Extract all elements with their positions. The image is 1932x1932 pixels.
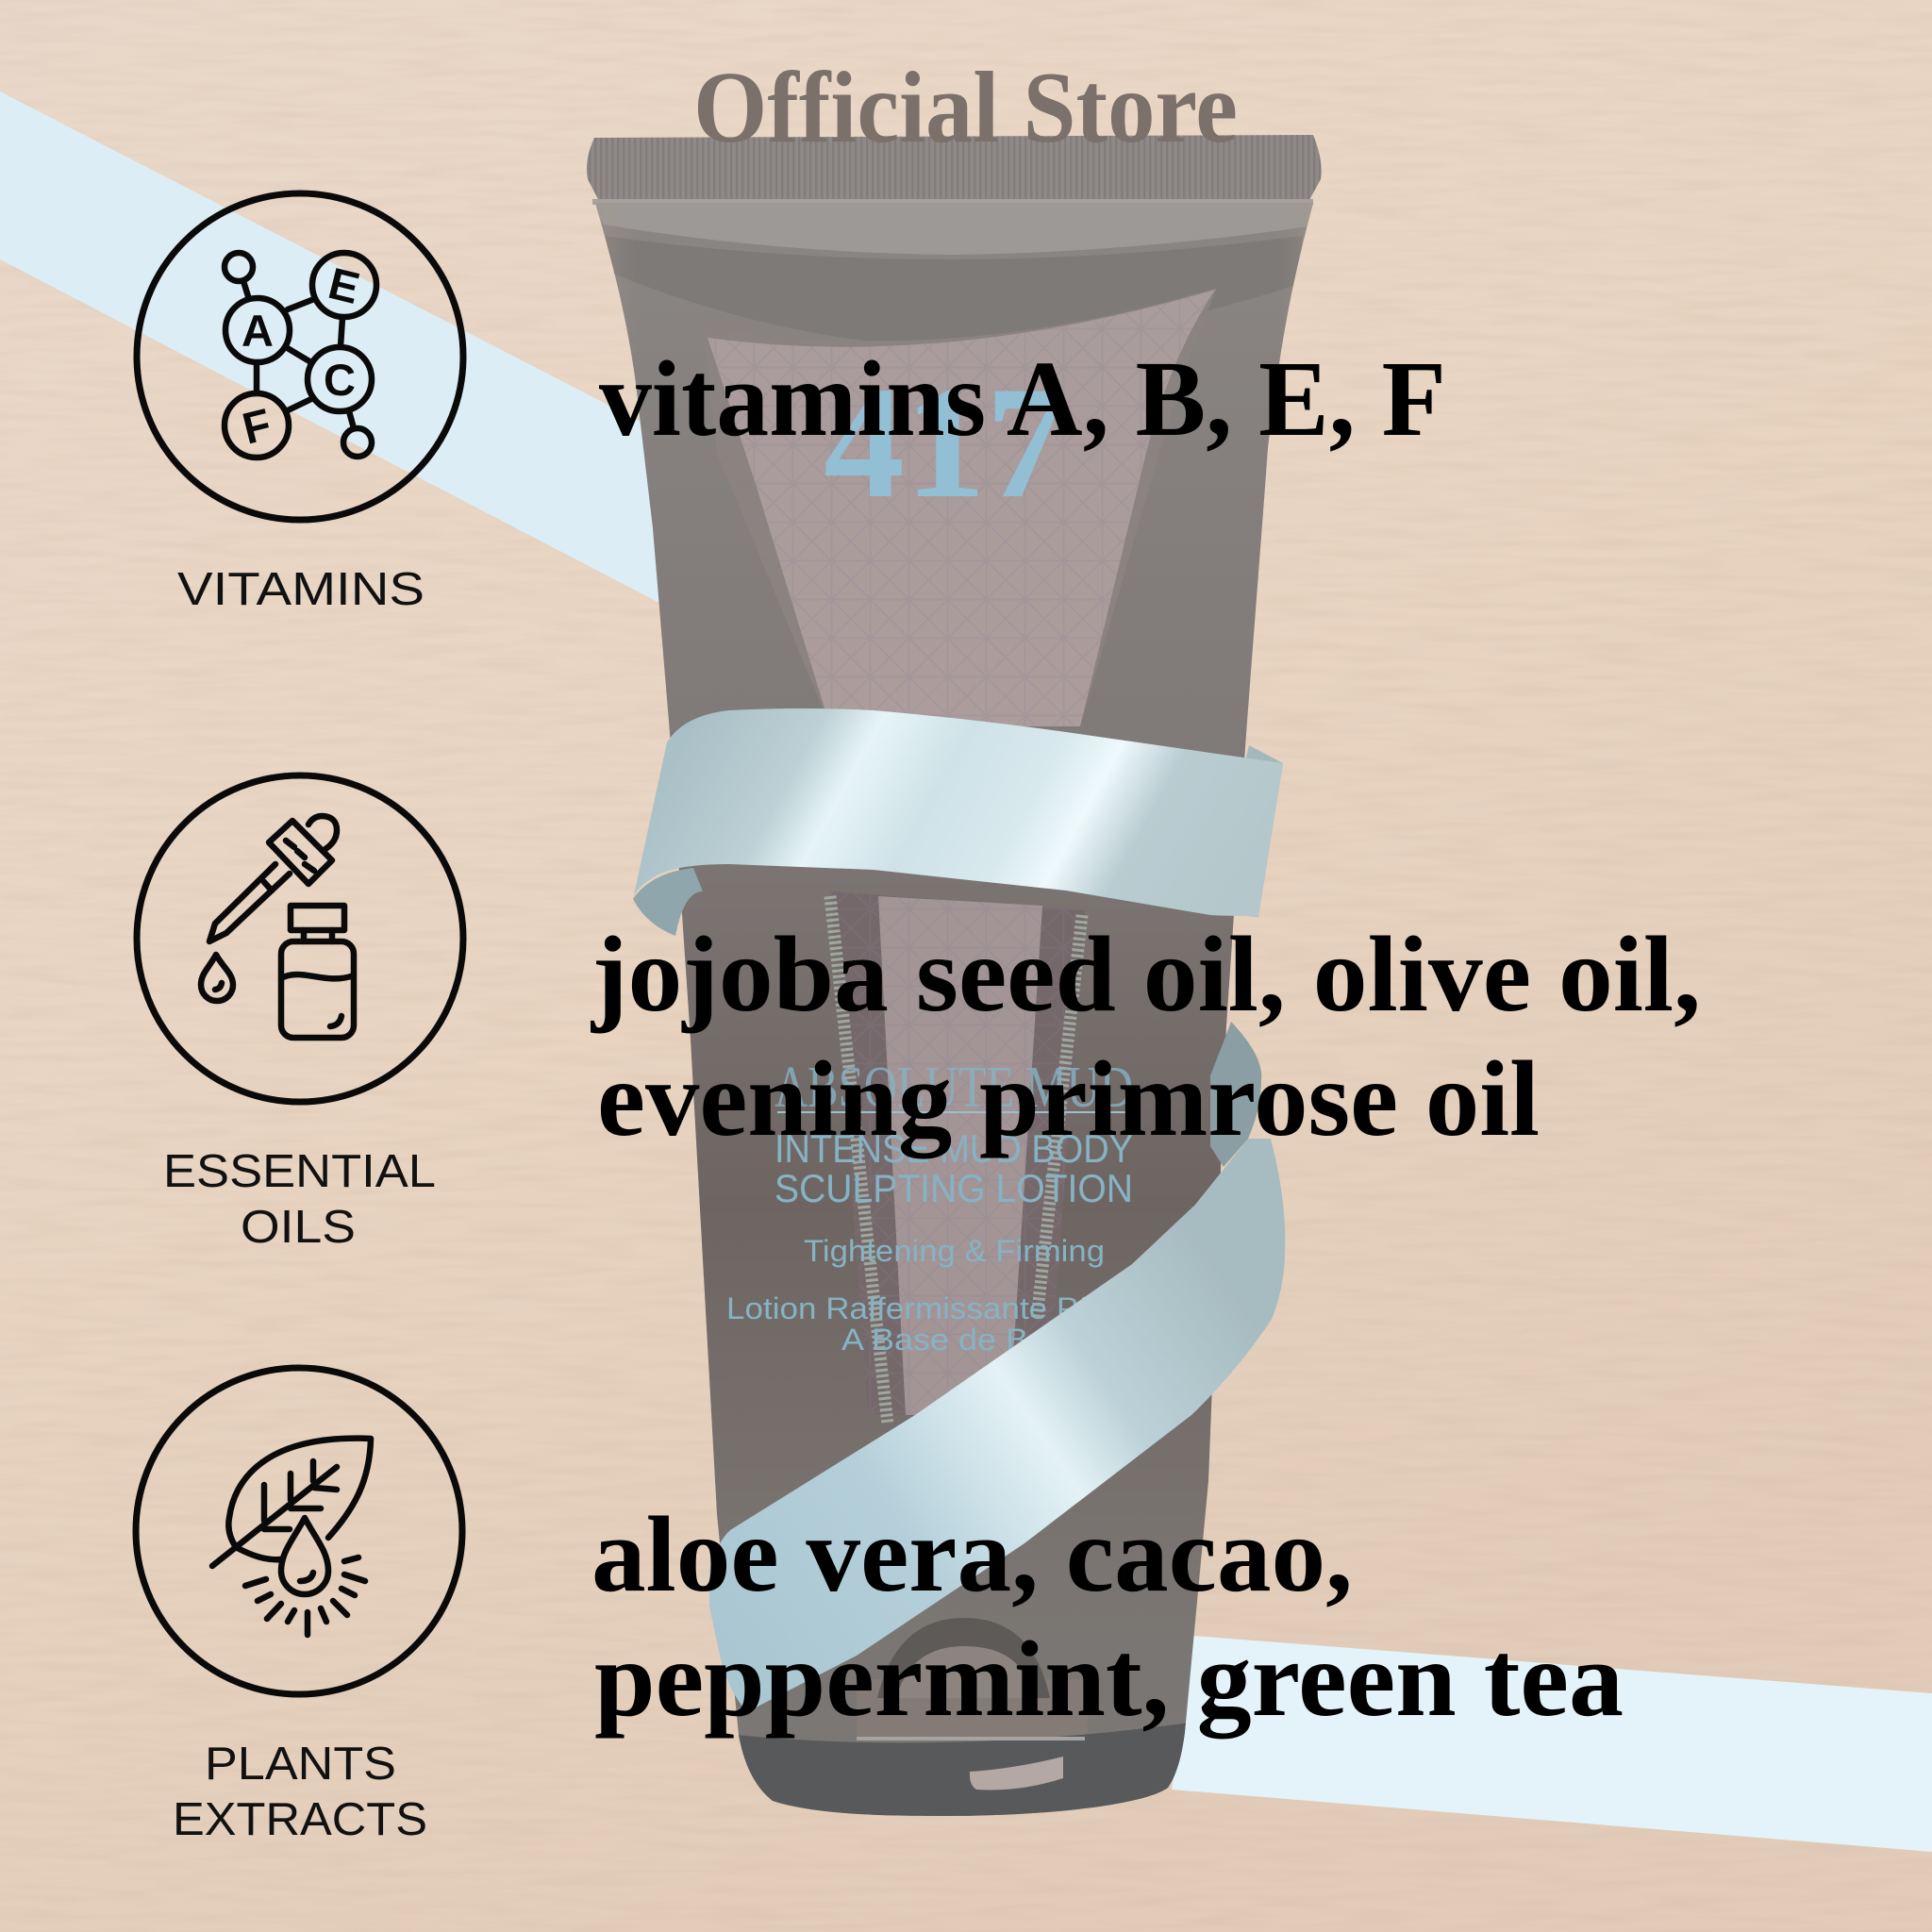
ribbon: wrap around tube upper loop bbox=[633, 708, 1283, 936]
ribbon: bottom-right strip bbox=[1172, 1636, 1932, 1852]
panel: plant extracts bbox=[136, 1368, 462, 1845]
tube beaded lines bbox=[830, 896, 1082, 1424]
icon: vitamin molecule bbox=[137, 193, 463, 520]
store heading: Official Store bbox=[693, 52, 1238, 164]
product tube bbox=[585, 135, 1330, 1821]
tube label text bbox=[726, 1056, 1134, 1357]
text: oil list: jojoba seed oil, olive oil, bbox=[591, 914, 1701, 1034]
text: plant list: peppermint, green tea bbox=[594, 1619, 1624, 1739]
label: essential oils: OILS bbox=[241, 1202, 356, 1253]
icon: vitamin molecule: E bbox=[324, 258, 365, 313]
panel: vitamins bbox=[137, 193, 463, 615]
tube label text: INTENSE MUD BODY bbox=[774, 1126, 1133, 1171]
tube cap bbox=[587, 135, 1322, 205]
label: plants extracts: PLANTS bbox=[205, 1739, 396, 1790]
label: plants extracts bbox=[173, 1739, 427, 1845]
icon: dropper and bottle bbox=[137, 775, 463, 1102]
text: oil list: evening primrose oil bbox=[597, 1039, 1540, 1158]
ribbon: wrap around tube lower spiral bbox=[709, 1022, 1285, 1712]
label: essential oils: ESSENTIAL bbox=[163, 1146, 436, 1197]
tube label text: Tightening & Firming bbox=[804, 1234, 1105, 1268]
icon: vitamin molecule: A bbox=[242, 306, 274, 356]
icon: vitamin molecule: C bbox=[324, 355, 356, 405]
icon: vitamin molecule: F bbox=[238, 398, 275, 454]
label: vitamins: VITAMINS bbox=[177, 564, 425, 615]
tube label text: ABSOLUTE MUD bbox=[774, 1056, 1133, 1120]
ribbon: top-left strip bbox=[0, 92, 679, 613]
panel: essential oils bbox=[137, 775, 463, 1253]
text: oil list bbox=[591, 914, 1701, 1158]
icon: leaf and drop bbox=[136, 1368, 462, 1694]
tube label text: SCULPTING LOTION bbox=[774, 1166, 1133, 1210]
tube brand number: 417 bbox=[824, 354, 1067, 531]
text: plant list: aloe vera, cacao, bbox=[591, 1494, 1353, 1614]
tube label text: Lotion Raffermissante Pfiut bbox=[726, 1291, 1123, 1325]
tube body bbox=[585, 203, 1330, 1821]
label: plants extracts: EXTRACTS bbox=[173, 1794, 427, 1845]
label: essential oils bbox=[163, 1146, 436, 1253]
tube label text: A Base de Bo bbox=[841, 1323, 1047, 1357]
text: vitamin list: vitamins A, B, E, F bbox=[599, 339, 1446, 458]
text: plant list bbox=[591, 1494, 1624, 1739]
